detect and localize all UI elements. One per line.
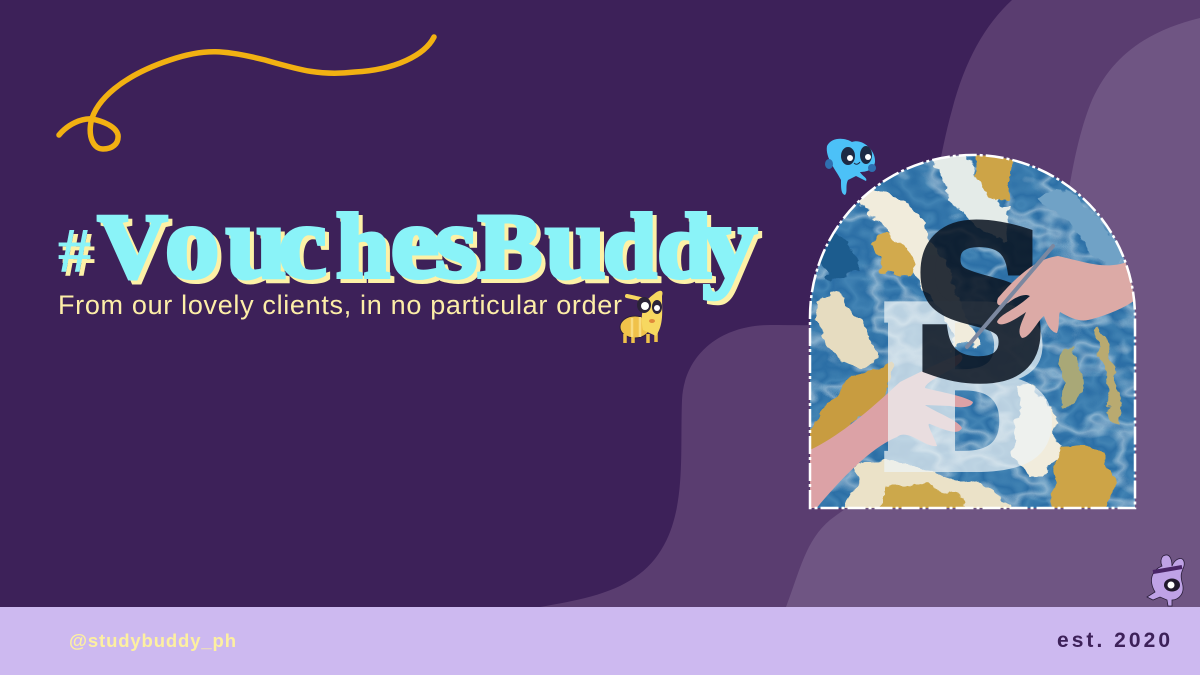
title main layer: h (336, 196, 390, 297)
title: #VouchesBuddy (58, 185, 761, 304)
title shadow layer: u (549, 189, 610, 304)
title shadow layer: # (62, 220, 95, 291)
title shadow layer: dd (607, 200, 715, 301)
icon: yellow mascot (620, 291, 663, 343)
title shadow layer: h (340, 200, 394, 301)
letter B light overlay (884, 301, 1052, 472)
marble texture (810, 155, 1135, 508)
title main layer: # (58, 216, 91, 287)
dashed arch border (810, 155, 1135, 508)
title shadow layer: es (395, 189, 481, 304)
footer bar (0, 607, 1200, 675)
icon: purple mascot (1147, 555, 1184, 606)
footer established year: est. 2020 (1057, 629, 1170, 652)
title main layer: ou (165, 185, 286, 300)
title shadow layer: ou (169, 189, 290, 304)
top-right hand with brush (967, 246, 1138, 347)
letter S dark overlay: S (916, 190, 1044, 420)
title main layer: c (278, 185, 327, 300)
title main layer: es (391, 185, 477, 300)
title shadow layer: V (102, 200, 171, 301)
background wave: light purple (786, 18, 1200, 607)
icon: blue mascot (825, 139, 876, 195)
bottom-left hand (805, 354, 973, 510)
title main layer: V (98, 196, 167, 297)
letter B light overlay: B (878, 259, 1060, 521)
title main layer: B (478, 196, 542, 297)
decorative yellow squiggle (59, 37, 434, 149)
title shadow layer: y (706, 189, 761, 304)
panel: marble arch image (808, 154, 1136, 510)
title main layer: u (545, 185, 606, 300)
subtitle: From our lovely clients, in no particular order (58, 290, 622, 320)
footer handle: @studybuddy_ph (69, 630, 236, 651)
title main layer: y (702, 185, 757, 300)
title main layer: dd (603, 196, 711, 297)
background wave: mid purple (540, 0, 1200, 607)
title shadow layer: c (282, 189, 331, 304)
title shadow layer: B (482, 200, 546, 301)
